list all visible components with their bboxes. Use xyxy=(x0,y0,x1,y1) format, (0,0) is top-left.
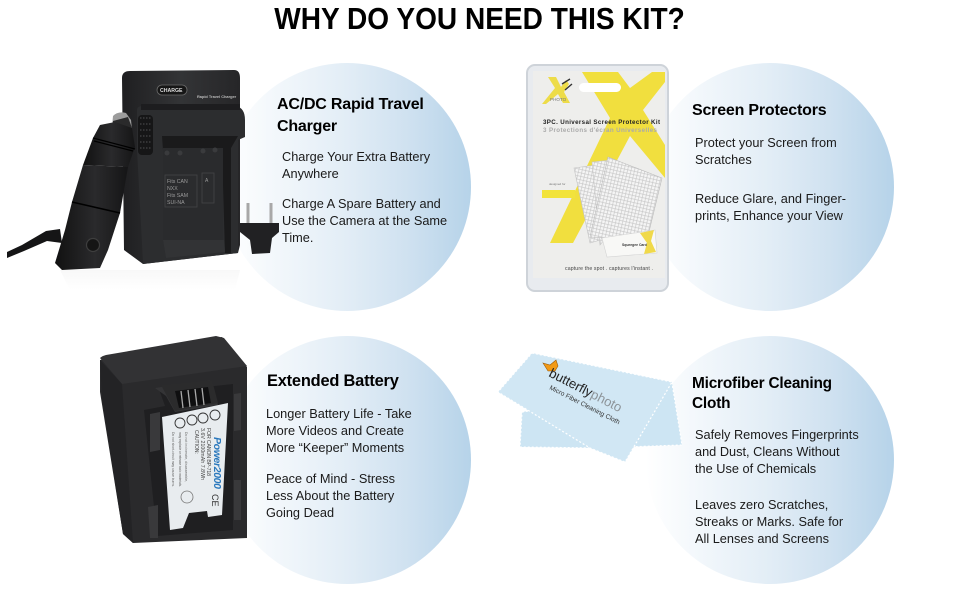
panel: screen protectors xyxy=(680,63,894,311)
heading: microfiber cloth xyxy=(692,375,832,412)
text: cloth benefits xyxy=(695,426,859,546)
panel: extended battery xyxy=(257,336,471,584)
icon: battery photo: 3.6V 2100mAh 7.8Wh xyxy=(199,428,205,480)
circle: cloth backdrop xyxy=(646,336,894,584)
text: cloth benefits: and Dust, Cleans Without xyxy=(695,444,840,458)
icon: battery photo: Power2000 xyxy=(211,437,223,489)
icon: cleaning cloth xyxy=(498,354,682,462)
icon: cleaning cloth: Micro Fiber Cleaning Cloth xyxy=(548,385,621,426)
icon: screen protector package: 3 Protections d'écran Universelles xyxy=(543,127,658,134)
heading: extended battery: Extended Battery xyxy=(267,372,399,390)
icon: battery photo: Do not short-circuit may cause burns. xyxy=(171,432,175,487)
heading: screen protectors: Screen Protectors xyxy=(692,102,826,118)
heading: microfiber cloth: Cloth xyxy=(692,395,730,412)
text: charger benefits: Anywhere xyxy=(282,166,339,181)
icon: screen protector package: 3PC. Universal Screen Protector Kit xyxy=(543,119,660,126)
text: battery benefits: Going Dead xyxy=(266,504,334,520)
text: screen protector benefits: Protect your Screen from xyxy=(695,134,837,150)
icon: cleaning cloth: butterflyphoto xyxy=(547,365,625,415)
car adapter xyxy=(7,229,62,258)
icon: screen protector package: Squeegee Card xyxy=(622,243,647,247)
text: cloth benefits: the Use of Chemicals xyxy=(695,460,816,476)
icon: charger photo: A xyxy=(205,178,209,184)
circle: screen protectors backdrop xyxy=(646,63,894,311)
icon: battery photo: Do not incinerate, disassemble, xyxy=(184,432,188,482)
text: battery benefits: More Videos and Create xyxy=(266,422,404,438)
text: cloth benefits: Leaves zero Scratches, xyxy=(695,496,828,512)
text: cloth benefits: All Lenses and Screens xyxy=(695,530,829,546)
title: WHY DO YOU NEED THIS KIT? xyxy=(274,1,685,36)
icon: charger photo: SUI-NA xyxy=(167,200,185,206)
text: battery benefits: Less About the Battery xyxy=(266,488,394,502)
icon: battery photo: CE xyxy=(210,494,220,507)
plug adapter xyxy=(246,203,250,223)
text: screen protector benefits: Reduce Glare, and Finger- xyxy=(695,190,846,206)
text: charger benefits xyxy=(282,149,447,244)
text: cloth benefits: Safely Removes Fingerprints xyxy=(695,426,859,442)
circle: charger backdrop xyxy=(223,63,471,311)
text: battery benefits: More “Keeper” Moments xyxy=(266,440,404,454)
icon: charger photo: Rapid Travel Charger xyxy=(197,94,237,99)
battery label xyxy=(162,403,228,530)
icon: battery photo: FOR CANON BP-718 xyxy=(205,428,211,476)
text: screen protector benefits: prints, Enhance your View xyxy=(695,208,843,222)
text: charger benefits: Charge Your Extra Battery xyxy=(282,149,430,164)
text: screen protector benefits: Scratches xyxy=(695,152,752,166)
icon: battery photo xyxy=(100,336,247,543)
text: charger benefits: Time. xyxy=(282,230,313,244)
icon: charger photo: Fits CAN xyxy=(167,179,188,185)
text: battery benefits xyxy=(266,406,412,520)
heading: charger: AC/DC Rapid Travel xyxy=(277,96,424,113)
panel: charger xyxy=(257,63,471,311)
icon: charger photo: NXX xyxy=(167,186,178,192)
circle: battery backdrop xyxy=(223,336,471,584)
icon: butterfly logo xyxy=(543,360,558,371)
text: screen protector benefits xyxy=(695,134,846,222)
icon: screen protector package: designed for xyxy=(549,182,566,186)
icon: battery photo: may explode or release toxic materials. xyxy=(178,432,182,487)
icon: charger photo: Fits SAM xyxy=(167,193,188,199)
text: cloth benefits: Streaks or Marks. Safe for xyxy=(695,514,843,528)
icon: screen protector package: capture the spot . captures l'instant . xyxy=(565,266,653,272)
icon: screen protector package xyxy=(526,64,669,292)
text: battery benefits: Longer Battery Life - Take xyxy=(266,406,412,420)
icon: battery photo: CAUTION: xyxy=(193,430,199,454)
icon: charger photo: CHARGE xyxy=(160,88,183,94)
heading: charger xyxy=(277,96,424,135)
text: charger benefits: Use the Camera at the Same xyxy=(282,212,447,228)
text: charger benefits: Charge A Spare Battery and xyxy=(282,196,441,210)
icon: screen protector package: PHOTO xyxy=(550,97,567,102)
panel: microfiber cloth xyxy=(680,336,894,584)
icon: charger photo xyxy=(7,70,279,270)
heading: microfiber cloth: Microfiber Cleaning xyxy=(692,375,832,392)
heading: charger: Charger xyxy=(277,118,337,135)
text: battery benefits: Peace of Mind - Stress xyxy=(266,470,395,486)
